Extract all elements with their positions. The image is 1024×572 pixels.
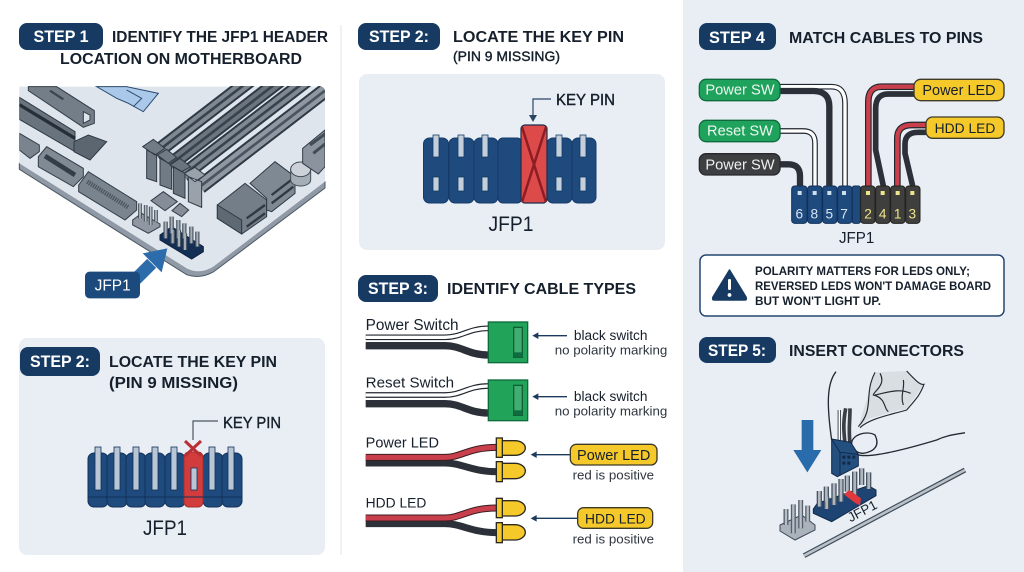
reset switch cable: Reset Switch bbox=[366, 375, 454, 392]
step 4 header bbox=[699, 23, 983, 50]
HDD LED cable: HDD LED bbox=[585, 510, 646, 526]
step 5 header bbox=[699, 337, 964, 363]
power LED cable: Power LED bbox=[577, 448, 650, 464]
panel: key pin detail bbox=[359, 74, 665, 250]
cable labels: Power SW bbox=[705, 83, 775, 99]
JFP1 silkscreen label: JFP1 bbox=[845, 497, 880, 525]
panel: step 2 left: STEP 2: bbox=[30, 352, 90, 371]
PCIe slots bbox=[28, 87, 94, 127]
power switch cable: no polarity marking bbox=[555, 342, 667, 357]
key pin arrow bbox=[529, 99, 551, 122]
reset switch cable: no polarity marking bbox=[555, 404, 667, 419]
JFP1 label: JFP1 bbox=[839, 230, 874, 247]
cable labels: Reset SW bbox=[707, 124, 773, 140]
step 4 header: MATCH CABLES TO PINS bbox=[789, 30, 983, 47]
JFP1 header bbox=[160, 227, 203, 259]
icon: warning triangle bbox=[713, 270, 746, 300]
JFP1 pin header: 7 bbox=[840, 206, 848, 221]
panel: step 2 left: LOCATE THE KEY PIN bbox=[109, 354, 277, 371]
JFP1 pin header: 5 bbox=[826, 206, 834, 221]
JFP1 label bbox=[85, 272, 140, 298]
step 3 header: IDENTIFY CABLE TYPES bbox=[447, 281, 636, 298]
wires bbox=[780, 87, 926, 188]
power switch cable: black switch bbox=[574, 328, 647, 343]
connector plug bbox=[832, 439, 858, 477]
JFP1 pin header: 2 bbox=[864, 206, 872, 221]
key pin callout: KEY PIN bbox=[223, 415, 281, 432]
power connector bbox=[303, 130, 325, 174]
step 5 header: INSERT CONNECTORS bbox=[789, 343, 964, 360]
panel: right column background bbox=[683, 0, 1024, 572]
chips bbox=[151, 192, 177, 211]
HDD LED cable: HDD LED bbox=[366, 495, 426, 511]
reset switch cable bbox=[366, 375, 667, 421]
JFP1 pin header: 3 bbox=[909, 206, 916, 221]
power LED cable: Power LED bbox=[366, 435, 439, 451]
step 2 header: (PIN 9 MISSING) bbox=[453, 48, 560, 64]
blue connector bbox=[97, 87, 158, 112]
JFP1 pin header: 4 bbox=[879, 206, 887, 221]
wiring diagram bbox=[699, 79, 1004, 247]
icon: down arrow bbox=[793, 420, 821, 472]
JFP1 pin header: 8 bbox=[811, 206, 818, 221]
callout: polarity warning: BUT WON'T LIGHT UP. bbox=[755, 294, 881, 308]
key pin label: KEY PIN bbox=[556, 92, 615, 109]
power switch cable: Power Switch bbox=[366, 317, 459, 334]
step 4 header: STEP 4 bbox=[709, 28, 766, 47]
key pin callout bbox=[185, 415, 281, 456]
connector: JFP1 pins bbox=[424, 125, 596, 203]
cable types diagram bbox=[366, 317, 667, 546]
step 5 header: STEP 5: bbox=[708, 341, 766, 360]
arrow to JFP1 bbox=[128, 248, 167, 287]
HDD LED cable: red is positive bbox=[573, 531, 654, 546]
panel: step 2 left: (PIN 9 MISSING) bbox=[109, 375, 238, 392]
cable labels: Power LED bbox=[922, 83, 996, 99]
step 2 header: STEP 2: bbox=[369, 27, 429, 46]
board edge bbox=[804, 470, 965, 556]
connector: JFP1 top view bbox=[88, 447, 242, 507]
power LED cable: red is positive bbox=[573, 467, 654, 482]
JFP1 pin header: 1 bbox=[894, 206, 901, 221]
small pin header bbox=[133, 213, 160, 233]
step 3 header bbox=[358, 275, 636, 302]
capacitor bbox=[291, 169, 311, 186]
callout: polarity warning: POLARITY MATTERS FOR LEDS ONLY; bbox=[755, 264, 970, 278]
step 1 header: IDENTIFY THE JFP1 HEADER bbox=[112, 29, 328, 46]
small header bbox=[780, 500, 815, 540]
cable labels bbox=[699, 79, 1004, 175]
reset switch cable: black switch bbox=[574, 389, 647, 404]
panel: step 2 left bbox=[19, 338, 325, 555]
step 1 header: STEP 1 bbox=[34, 27, 88, 46]
RAM latches bbox=[143, 139, 165, 182]
cable labels: HDD LED bbox=[935, 120, 995, 136]
power switch cable bbox=[366, 317, 667, 363]
RAM slots bbox=[157, 86, 254, 159]
step 1 header: LOCATION ON MOTHERBOARD bbox=[60, 51, 302, 68]
hand bbox=[828, 371, 965, 456]
JFP1 label: JFP1 bbox=[95, 278, 131, 295]
HDD LED cable bbox=[366, 495, 654, 546]
JFP1 pin header bbox=[813, 468, 876, 522]
step 3 header: STEP 3: bbox=[368, 279, 428, 298]
callout: polarity warning bbox=[700, 255, 1004, 316]
JFP1 label: JFP1 bbox=[488, 213, 534, 236]
callout: polarity warning: REVERSED LEDS WON'T DAMAGE BOARD bbox=[755, 279, 991, 293]
power LED cable bbox=[366, 435, 657, 482]
cable labels: Power SW bbox=[705, 157, 775, 173]
insert connector illustration bbox=[780, 371, 965, 556]
USB headers bbox=[19, 133, 39, 158]
step 2 header bbox=[358, 23, 624, 64]
JFP1 pin header bbox=[792, 186, 920, 223]
JFP1 label: JFP1 bbox=[143, 517, 187, 540]
motherboard illustration bbox=[18, 86, 326, 298]
step 1 header bbox=[19, 23, 328, 68]
step 2 header: LOCATE THE KEY PIN bbox=[453, 29, 624, 46]
JFP1 pin header: 6 bbox=[796, 206, 803, 221]
SATA ports bbox=[217, 183, 267, 234]
wires into plug bbox=[834, 410, 844, 440]
